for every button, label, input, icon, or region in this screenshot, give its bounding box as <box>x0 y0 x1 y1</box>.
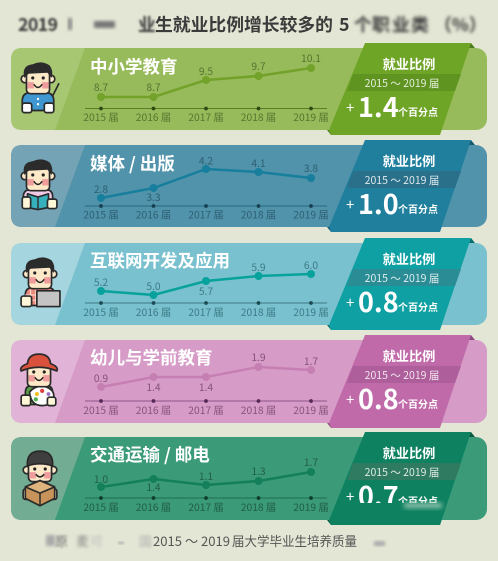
source note: 国 <box>139 531 152 550</box>
line chart: 2017 届 <box>188 499 224 514</box>
line chart: 8.7 <box>94 79 108 94</box>
badge: + <box>346 486 354 507</box>
line chart: 1.4 <box>199 379 213 394</box>
line chart: 1.1 <box>199 468 213 483</box>
line chart: 2015 届 <box>83 402 119 417</box>
icon: teacher <box>21 62 59 113</box>
line chart <box>83 349 329 417</box>
line chart: 2015 届 <box>83 499 119 514</box>
badge: 个百分点 <box>398 104 438 119</box>
badge <box>327 432 475 525</box>
badge: 就业比例 <box>383 54 435 73</box>
line chart: 1.7 <box>304 353 318 368</box>
line chart: 1.9 <box>251 349 266 364</box>
line chart <box>83 257 329 319</box>
icon: art teacher <box>21 354 57 406</box>
badge: 2015 ～ 2019 届 <box>365 76 439 91</box>
heading: 媒体 / 出版 <box>90 151 175 176</box>
badge: 个百分点 <box>398 396 438 411</box>
line chart: 2017 届 <box>188 206 224 222</box>
icon: reader <box>21 159 57 210</box>
heading: 互联网开发及应用 <box>90 248 230 273</box>
line chart: 6.0 <box>304 257 318 272</box>
line chart: 2017 届 <box>188 402 224 417</box>
title <box>18 11 487 37</box>
title: （%） <box>434 11 487 37</box>
badge: 就业比例 <box>383 443 435 462</box>
line chart: 2016 届 <box>136 304 171 319</box>
badge: 2015 ～ 2019 届 <box>365 465 439 480</box>
line chart: 9.7 <box>251 58 266 73</box>
source note: 2015 ～ 2019 <box>153 531 230 550</box>
line chart: 2018 届 <box>241 402 276 417</box>
line chart: 2019 届 <box>293 109 329 124</box>
line chart: 2019 届 <box>293 402 329 417</box>
title: 职 <box>372 11 390 37</box>
line chart <box>83 454 329 514</box>
line chart: 2017 届 <box>188 109 224 124</box>
line chart: 10.1 <box>301 50 321 65</box>
heading: 幼儿与学前教育 <box>90 345 212 370</box>
line chart: 4.1 <box>251 155 266 170</box>
badge <box>327 140 475 232</box>
line chart: 9.5 <box>199 63 213 78</box>
line chart: 2018 届 <box>241 109 276 124</box>
badge: 个百分点 <box>398 201 438 216</box>
line chart: 1.4 <box>146 479 161 494</box>
line chart: 2016 届 <box>136 499 171 514</box>
badge <box>327 335 475 428</box>
line chart: 2015 届 <box>83 109 119 124</box>
panel: 交通运输 / 邮电 <box>11 432 487 525</box>
line chart <box>83 50 329 124</box>
title: 类 <box>411 11 429 37</box>
line chart: 8.7 <box>146 79 161 94</box>
line chart: 2016 届 <box>136 206 171 222</box>
line chart: 5.9 <box>251 259 266 274</box>
title: 生就业比例增长较多的 <box>155 11 333 37</box>
line chart: 5.2 <box>94 274 108 289</box>
line chart: 3.8 <box>304 160 318 175</box>
line chart: 1.3 <box>251 463 266 478</box>
badge: 1.0 <box>358 183 399 222</box>
badge: + <box>346 292 354 313</box>
line chart: 2017 届 <box>188 304 224 319</box>
panel: 中小学教育 <box>11 43 487 135</box>
source note: 麦 <box>76 531 89 550</box>
line chart: 2018 届 <box>241 206 276 222</box>
icon: courier with parcel <box>23 451 57 506</box>
badge: + <box>346 97 354 118</box>
line chart: 2019 届 <box>293 206 329 222</box>
line chart: 2019 届 <box>293 304 329 319</box>
heading: 中小学教育 <box>90 54 178 79</box>
icon: programmer <box>21 257 60 307</box>
badge: 就业比例 <box>383 346 435 365</box>
title: 2019 <box>18 11 58 37</box>
line chart: 4.2 <box>199 152 213 168</box>
line chart: 1.4 <box>146 379 161 394</box>
badge: 0.7 <box>358 475 399 514</box>
badge: 2015 ～ 2019 届 <box>365 271 439 286</box>
title: 业 <box>392 11 410 37</box>
badge <box>327 43 475 135</box>
line chart: 2.8 <box>94 181 108 196</box>
line chart: 0.9 <box>94 370 108 385</box>
badge: 个百分点 <box>398 299 438 314</box>
panel: 媒体 / 出版 <box>11 140 487 232</box>
line chart: 2015 届 <box>83 206 119 222</box>
line chart: 2018 届 <box>241 304 276 319</box>
badge: + <box>346 194 354 215</box>
line chart: 2018 届 <box>241 499 276 514</box>
badge: 0.8 <box>358 378 399 417</box>
heading: 交通运输 / 邮电 <box>90 442 210 467</box>
title: 业 <box>138 11 156 37</box>
panel: 幼儿与学前教育 <box>11 335 487 428</box>
title: 个 <box>354 11 372 37</box>
line chart: 2016 届 <box>136 402 171 417</box>
line chart: 2019 届 <box>293 499 329 514</box>
line chart <box>83 152 329 222</box>
source note <box>46 531 385 550</box>
line chart: 5.7 <box>199 283 213 298</box>
badge: 0.8 <box>358 281 399 320</box>
source note: 可 <box>90 531 103 550</box>
source note: 届大学毕业生培养质量 <box>232 531 357 550</box>
badge <box>327 238 475 330</box>
badge: 2015 ～ 2019 届 <box>365 368 439 383</box>
badge: 2015 ～ 2019 届 <box>365 173 439 188</box>
badge: + <box>346 389 354 410</box>
panel: 互联网开发及应用 <box>11 238 487 330</box>
line chart: 1.0 <box>94 471 108 486</box>
line chart: 3.3 <box>146 189 161 204</box>
badge: 就业比例 <box>383 151 435 170</box>
badge: 个百分点 <box>398 493 438 508</box>
line chart: 1.7 <box>304 454 318 469</box>
line chart: 2015 届 <box>83 304 119 319</box>
badge: 1.4 <box>358 86 399 125</box>
badge: 就业比例 <box>383 249 435 268</box>
title: 5 <box>339 11 350 37</box>
line chart: 2016 届 <box>136 109 171 124</box>
source note: 原： <box>55 531 69 550</box>
line chart: 5.0 <box>146 278 161 293</box>
